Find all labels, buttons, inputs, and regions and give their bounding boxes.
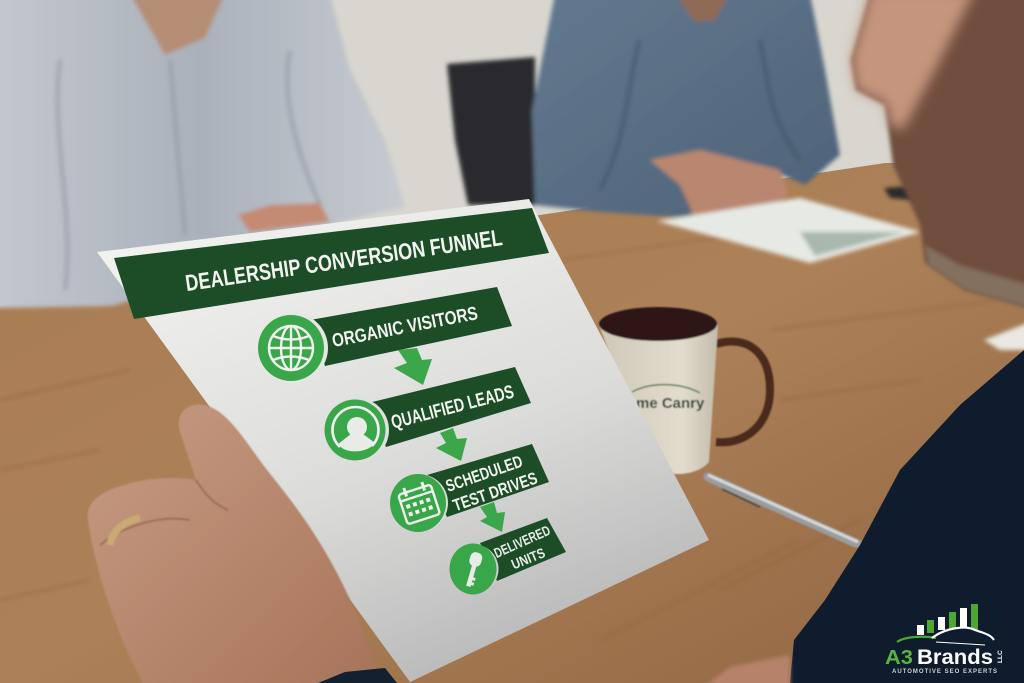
- band: [480, 518, 566, 581]
- arrow 2: [436, 428, 467, 461]
- person: right man shirt: [532, 0, 840, 218]
- mug coffee: [599, 307, 717, 341]
- foreground man: face and beard: [851, 0, 1024, 308]
- foreground man: dark jacket: [790, 350, 1024, 683]
- label line 1: SCHEDULED: [443, 452, 525, 496]
- coffee mug: [599, 307, 770, 474]
- holding hand: [88, 404, 382, 683]
- funnel step 4: delivered units: [450, 518, 566, 594]
- phone on table: [884, 186, 913, 200]
- logo LLC: LLC: [997, 650, 1004, 663]
- band: [427, 444, 549, 517]
- conference table: [0, 163, 1024, 683]
- title band: [114, 208, 549, 319]
- logo car: [897, 628, 994, 645]
- arrow 1: [394, 348, 432, 385]
- icon: globe: [258, 313, 328, 383]
- funnel step 1: organic visitors: [258, 287, 512, 383]
- label: QUALIFIED LEADS: [389, 382, 516, 434]
- label: ORGANIC VISITORS: [330, 303, 480, 352]
- chair: [447, 57, 535, 205]
- logo tagline: AUTOMOTIVE SEO EXPERTS: [892, 669, 997, 675]
- foreground man: second hand at the bottom: [700, 655, 790, 683]
- label line 2: TEST DRIVES: [451, 468, 540, 515]
- icon: person: [324, 398, 389, 462]
- person: left man hand: [238, 203, 330, 232]
- title: DEALERSHIP CONVERSION FUNNEL: [184, 224, 504, 296]
- icon: key: [450, 544, 498, 594]
- office wall background: [0, 0, 1024, 320]
- label line 1: DELIVERED: [491, 522, 553, 561]
- paper sheet: [97, 199, 709, 682]
- band: [368, 367, 531, 447]
- sleeve at the bottom of the hand: [318, 668, 397, 683]
- A3 Brands logo: [885, 604, 1004, 675]
- person: right man hands: [650, 150, 788, 223]
- blurred seated people: [0, 0, 1024, 350]
- logo wordmark A3: A3: [885, 647, 913, 669]
- wood grain: [0, 215, 1000, 640]
- logo bars: [917, 604, 978, 635]
- band: [310, 287, 512, 366]
- paper handout: [97, 199, 709, 682]
- silver pen: [708, 475, 858, 544]
- mug body: [599, 325, 718, 474]
- finger creases: [100, 480, 228, 545]
- person: left man shirt: [0, 0, 405, 308]
- person: right man neck: [675, 0, 730, 22]
- logo wordmark Brands: Brands: [917, 646, 993, 669]
- mug logo text: me Canry: [636, 395, 705, 412]
- paper at far right: [984, 322, 1024, 350]
- mug handle: [716, 341, 770, 442]
- documents on table: [657, 198, 921, 263]
- mug logo car: [632, 385, 700, 393]
- funnel step 3: scheduled test drives: [390, 444, 549, 532]
- icon: calendar: [390, 474, 448, 532]
- arrow 3: [480, 502, 505, 532]
- shirt folds: [58, 50, 320, 290]
- label line 2: UNITS: [509, 544, 547, 572]
- person: left man neck: [130, 0, 225, 55]
- funnel step 2: qualified leads: [324, 367, 531, 462]
- gold ring: [110, 518, 140, 545]
- shirt folds: [600, 40, 800, 190]
